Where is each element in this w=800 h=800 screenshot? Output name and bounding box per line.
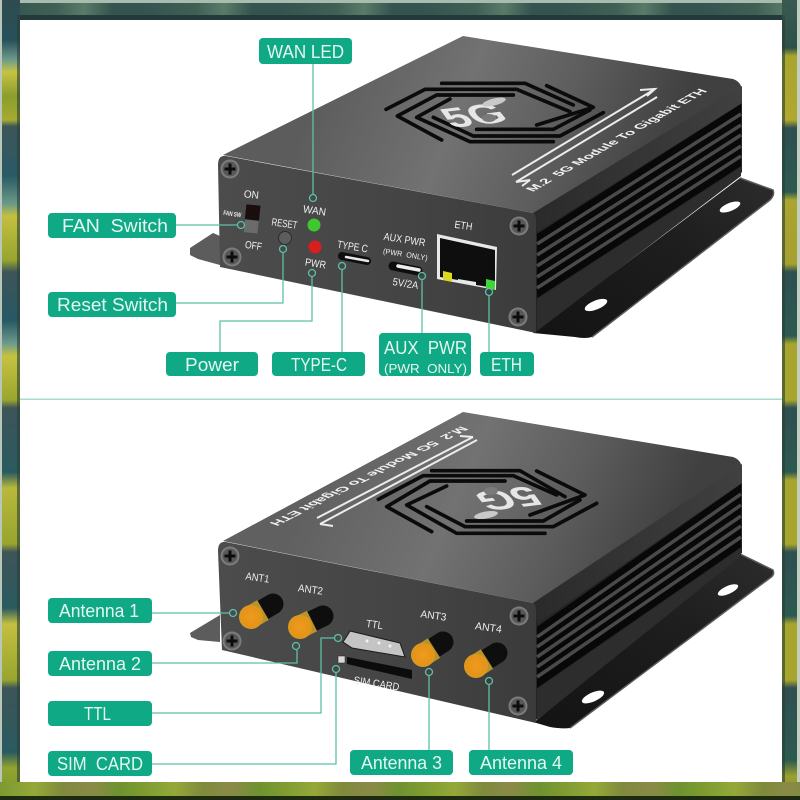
- label: Power: Power: [185, 355, 239, 375]
- left mounting flange: [190, 615, 220, 642]
- front panel printed labels: [223, 188, 473, 292]
- top face: [223, 412, 742, 603]
- label: AUX PWR: [379, 333, 471, 376]
- front panel printed labels: ANT4: [474, 620, 503, 636]
- reset button: [278, 232, 292, 244]
- label: Antenna 3: Antenna 3: [361, 753, 442, 773]
- section divider: [20, 398, 782, 400]
- label: WAN LED: [259, 38, 352, 64]
- front panel printed labels: TTL: [365, 618, 384, 632]
- label: ETH: ETH: [491, 355, 522, 375]
- front panel printed labels: 5V/2A: [392, 276, 419, 292]
- front panel printed labels: AUX PWR: [383, 231, 426, 249]
- label: Reset Switch: [48, 292, 176, 317]
- side face with fins: [533, 464, 742, 720]
- hexagon vents: [386, 83, 603, 142]
- right mounting flange: [533, 553, 774, 728]
- label: AUX PWR: AUX PWR: [384, 338, 467, 358]
- front face: [218, 156, 536, 333]
- label: SIM CARD: SIM CARD: [57, 754, 143, 774]
- front corner screws: [220, 546, 528, 716]
- antenna connector 2: [288, 615, 323, 639]
- front panel printed labels: [245, 570, 503, 694]
- label: Power: [166, 352, 258, 376]
- label: Reset Switch: Reset Switch: [57, 295, 168, 315]
- label: Antenna 1: Antenna 1: [59, 601, 139, 621]
- SIM card slot: [338, 656, 412, 679]
- ethernet jack: [437, 234, 497, 290]
- WAN LED: [308, 218, 320, 232]
- left mounting flange: [190, 233, 220, 265]
- label: TYPE-C: [272, 352, 365, 376]
- label: Antenna 2: [48, 651, 152, 676]
- front panel printed labels: FAN SW: [223, 210, 242, 219]
- hexagon vents: [378, 471, 597, 533]
- AUX power port: [393, 266, 419, 271]
- front panel printed labels: WAN: [302, 203, 327, 219]
- label: AUX PWR: (PWR ONLY): [384, 361, 467, 376]
- power LED: [308, 240, 322, 254]
- callout leader lines and target rings: [152, 64, 492, 764]
- device: bottom view, antenna ports: [190, 412, 774, 728]
- front panel printed labels: OFF: [244, 239, 263, 253]
- front panel printed labels: PWR: [304, 256, 327, 272]
- label: Antenna 4: [469, 750, 573, 775]
- front panel printed labels: ETH: [454, 219, 473, 233]
- right mounting flange: [533, 178, 774, 338]
- antenna connector 4: [464, 653, 497, 678]
- label: TYPE-C: TYPE-C: [291, 355, 347, 375]
- label: WAN LED: WAN LED: [267, 42, 344, 62]
- device: top view, front ports: [190, 36, 774, 338]
- side face with fins: [533, 86, 742, 332]
- product name on lid: M.2 5G Module To Gigabit ETH: [522, 87, 711, 193]
- 5G logo: 5G: [466, 480, 549, 516]
- front panel printed labels: ANT1: [245, 570, 270, 586]
- front face: [218, 542, 536, 723]
- label: Antenna 1: [48, 598, 152, 623]
- label: TTL: [48, 701, 152, 726]
- front panel printed labels: ON: [243, 188, 259, 202]
- product name on lid: M.2 5G Module To Gigabit ETH: [266, 425, 472, 527]
- 5G logo: 5G: [433, 98, 516, 134]
- label: Antenna 3: [350, 750, 453, 775]
- label: ETH: [480, 352, 534, 376]
- label: Antenna 4: Antenna 4: [480, 753, 562, 773]
- label: FAN Switch: [48, 213, 176, 238]
- front panel printed labels: (PWR ONLY): [382, 247, 429, 263]
- arrows: [317, 436, 477, 526]
- front panel printed labels: SIM CARD: [353, 675, 400, 694]
- label: TTL: TTL: [84, 704, 111, 724]
- front panel printed labels: TYPE C: [336, 239, 369, 255]
- TTL connector: [343, 631, 405, 657]
- label: FAN Switch: FAN Switch: [62, 216, 168, 236]
- front panel printed labels: ANT3: [420, 608, 447, 624]
- label: Antenna 2: Antenna 2: [59, 654, 141, 674]
- USB-C port: [342, 256, 368, 261]
- top face: [223, 36, 742, 213]
- fan switch: [244, 204, 260, 234]
- front panel printed labels: RESET: [271, 216, 299, 232]
- antenna connector 1: [239, 604, 273, 629]
- front corner screws: [220, 160, 528, 326]
- antenna connector 3: [411, 642, 443, 667]
- front panel printed labels: ANT2: [297, 582, 324, 598]
- arrows: [512, 89, 657, 186]
